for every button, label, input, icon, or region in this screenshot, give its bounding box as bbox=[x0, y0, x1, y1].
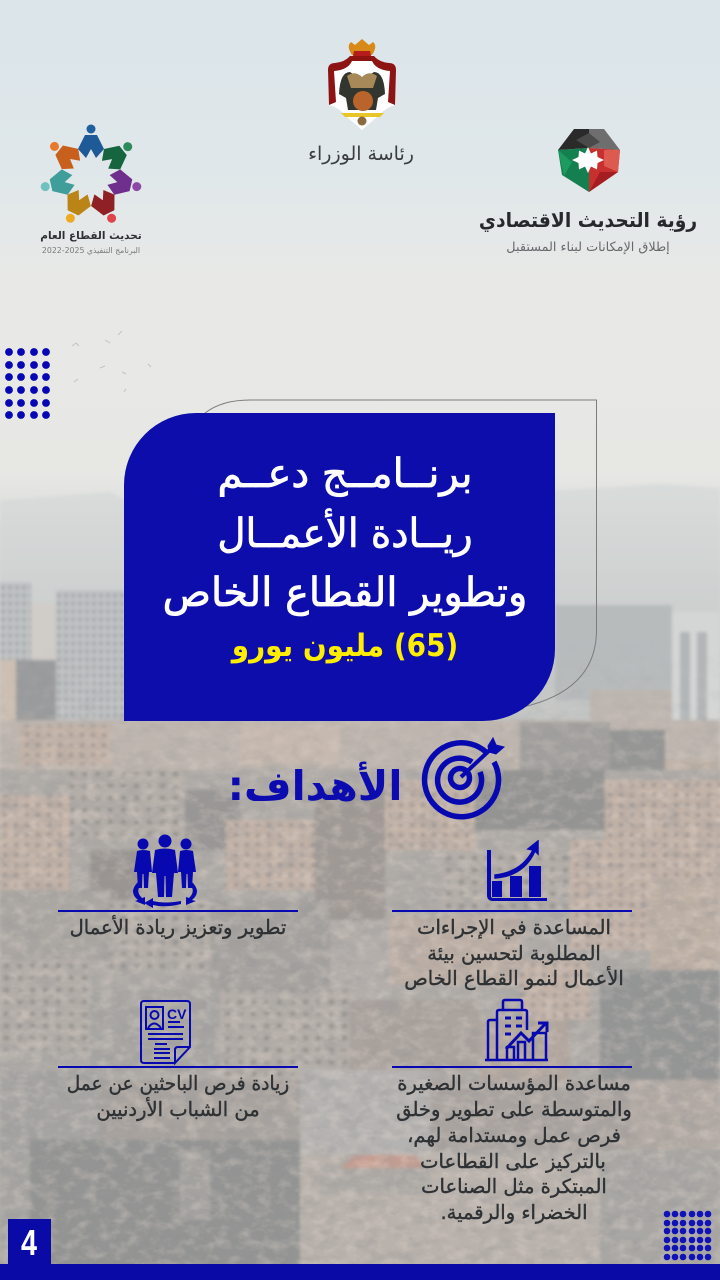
objective text bbox=[67, 1072, 289, 1122]
icon: office building with growth line bbox=[485, 998, 548, 1062]
objective text: والمتوسطة على تطوير وخلق bbox=[396, 1098, 632, 1121]
label: vision name: رؤية التحديث الاقتصادي bbox=[479, 208, 697, 232]
title line 2: ريــادة الأعمــال bbox=[217, 511, 473, 557]
objective 1: business environment bbox=[392, 840, 632, 990]
logo: public sector modernisation star bbox=[40, 124, 142, 223]
objective text: الأعمال لنمو القطاع الخاص bbox=[404, 967, 624, 990]
objective text: من الشباب الأردنيين bbox=[96, 1098, 260, 1121]
objective text: زيادة فرص الباحثين عن عمل bbox=[67, 1072, 289, 1095]
objective text: المبتكرة مثل الصناعات bbox=[421, 1175, 607, 1198]
page number badge bbox=[8, 1219, 51, 1264]
objective text: مساعدة المؤسسات الصغيرة bbox=[397, 1072, 631, 1095]
label: executive programme years: البرنامج التنفيذي 2025-2022 bbox=[42, 246, 140, 255]
objective text bbox=[396, 1072, 632, 1224]
icon: rising bar chart bbox=[487, 840, 547, 901]
logo text: vision headline bbox=[479, 208, 697, 255]
objective text: بالتركيز على القطاعات bbox=[420, 1150, 606, 1173]
left decorative dot grid bbox=[5, 348, 50, 419]
logo text: public sector modernisation bbox=[40, 230, 142, 256]
objective 2: entrepreneurship bbox=[58, 834, 298, 940]
objective 3: SMEs bbox=[392, 998, 632, 1224]
logo text: prime ministry: رئاسة الوزراء bbox=[308, 143, 414, 165]
objective text: الخضراء والرقمية. bbox=[440, 1201, 588, 1224]
rule bbox=[58, 1066, 298, 1068]
heading: objectives: الأهداف: bbox=[228, 762, 402, 810]
objective text bbox=[404, 916, 624, 990]
title line 1: برنــامــج دعــم bbox=[217, 451, 473, 497]
icon: CV document bbox=[140, 1000, 191, 1066]
objective text: فرص عمل ومستدامة لهم، bbox=[407, 1124, 621, 1147]
rule bbox=[392, 910, 632, 912]
right towers bbox=[555, 605, 672, 700]
icon: CV document: CV bbox=[167, 1006, 187, 1022]
funding amount: (65) مليون يورو bbox=[232, 628, 458, 664]
bottom band bbox=[0, 1264, 720, 1280]
page number badge: 4 bbox=[21, 1222, 38, 1263]
left towers bbox=[0, 582, 31, 717]
panel: programme title bbox=[124, 413, 555, 721]
logo: coat of arms of Jordan bbox=[328, 39, 396, 130]
mid band bbox=[0, 720, 720, 800]
title line 3: وتطوير القطاع الخاص bbox=[163, 570, 527, 616]
icon: target with arrow bbox=[422, 737, 505, 820]
panel outline behind title bbox=[204, 400, 597, 707]
rule bbox=[58, 910, 298, 912]
objective 4: youth jobs bbox=[58, 1000, 298, 1122]
label: sector name: تحديث القطاع العام bbox=[40, 230, 142, 242]
objective text: تطوير وتعزيز ريادة الأعمال bbox=[70, 916, 286, 939]
right decorative dot grid bbox=[664, 1210, 712, 1260]
objective text: المطلوبة لتحسين بيئة bbox=[427, 942, 601, 965]
rule bbox=[392, 1066, 632, 1068]
objective text: المساعدة في الإجراءات bbox=[417, 916, 611, 939]
icon: three business people in a cycle bbox=[133, 834, 197, 908]
label: vision tagline: إطلاق الإمكانات لبناء المستقبل bbox=[506, 240, 670, 255]
logo: economic modernisation vision bbox=[558, 129, 620, 192]
